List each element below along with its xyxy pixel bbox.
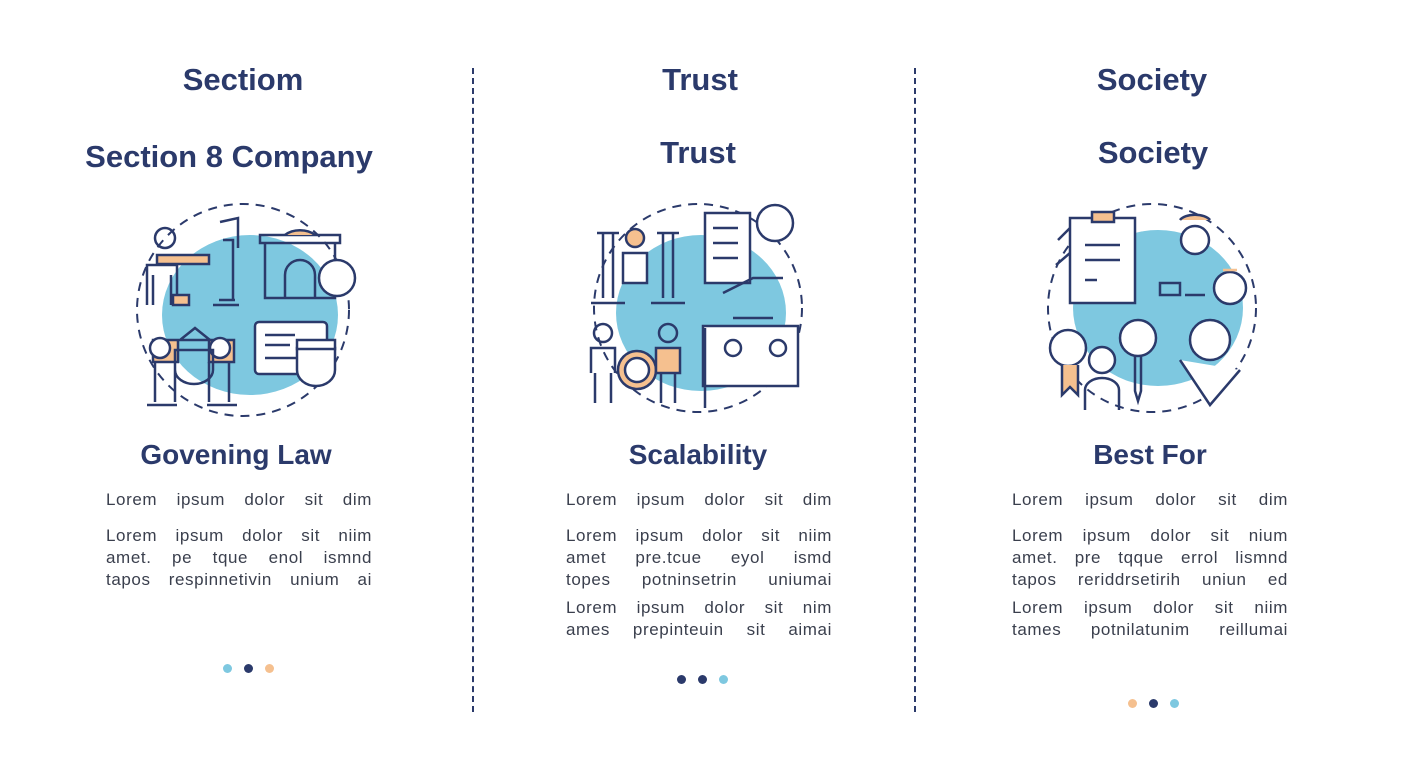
icon: governing law illustration: [136, 203, 356, 417]
column 2 subtitle: Trust: [660, 135, 736, 170]
column 1 title: Sectiom: [183, 62, 303, 97]
icon: scalability illustration: [590, 203, 803, 413]
column 1 dots: [223, 664, 274, 673]
column 2 text: Lorem ipsum dolor sit dim: [566, 490, 832, 509]
column 2 heading: Scalability: [629, 439, 767, 470]
column 2 dots: [677, 675, 728, 684]
column 3 text: amet. pre tqque errol lismnd: [1012, 548, 1288, 567]
column 2 title: Trust: [662, 62, 738, 97]
column 2 text: ames prepinteuin sit aimai: [566, 620, 832, 639]
column 2 text: [566, 490, 832, 639]
column 1 text: Lorem ipsum dolor sit dim: [106, 490, 372, 509]
column 2 text: topes potninsetrin uniumai: [566, 570, 832, 589]
column 2 text: Lorem ipsum dolor sit nim: [566, 598, 832, 617]
column 3 text: tames potnilatunim reillumai: [1012, 620, 1288, 639]
column 3 text: Lorem ipsum dolor sit nium: [1012, 526, 1288, 545]
column 3 heading: Best For: [1093, 439, 1207, 470]
column 2 text: Lorem ipsum dolor sit niim: [566, 526, 832, 545]
column 3 dots: [1128, 699, 1179, 708]
column 1 text: [106, 490, 372, 589]
column 3 text: Lorem ipsum dolor sit niim: [1012, 598, 1288, 617]
column 3 subtitle: Society: [1098, 135, 1208, 170]
column 2 text: amet pre.tcue eyol ismd: [566, 548, 832, 567]
column 1 text: amet. pe tque enol ismnd: [106, 548, 372, 567]
column 3 text: [1012, 490, 1288, 639]
column 3 text: tapos reriddrsetirih uniun ed: [1012, 570, 1288, 589]
column 1 text: Lorem ipsum dolor sit niim: [106, 526, 372, 545]
icon: best for illustration: [1047, 203, 1257, 413]
column 3 text: Lorem ipsum dolor sit dim: [1012, 490, 1288, 509]
column 3 title: Society: [1097, 62, 1207, 97]
column 1 subtitle: Section 8 Company: [85, 139, 373, 174]
column 1 text: tapos respinnetivin unium ai: [106, 570, 372, 589]
column 1 heading: Govening Law: [140, 439, 332, 470]
